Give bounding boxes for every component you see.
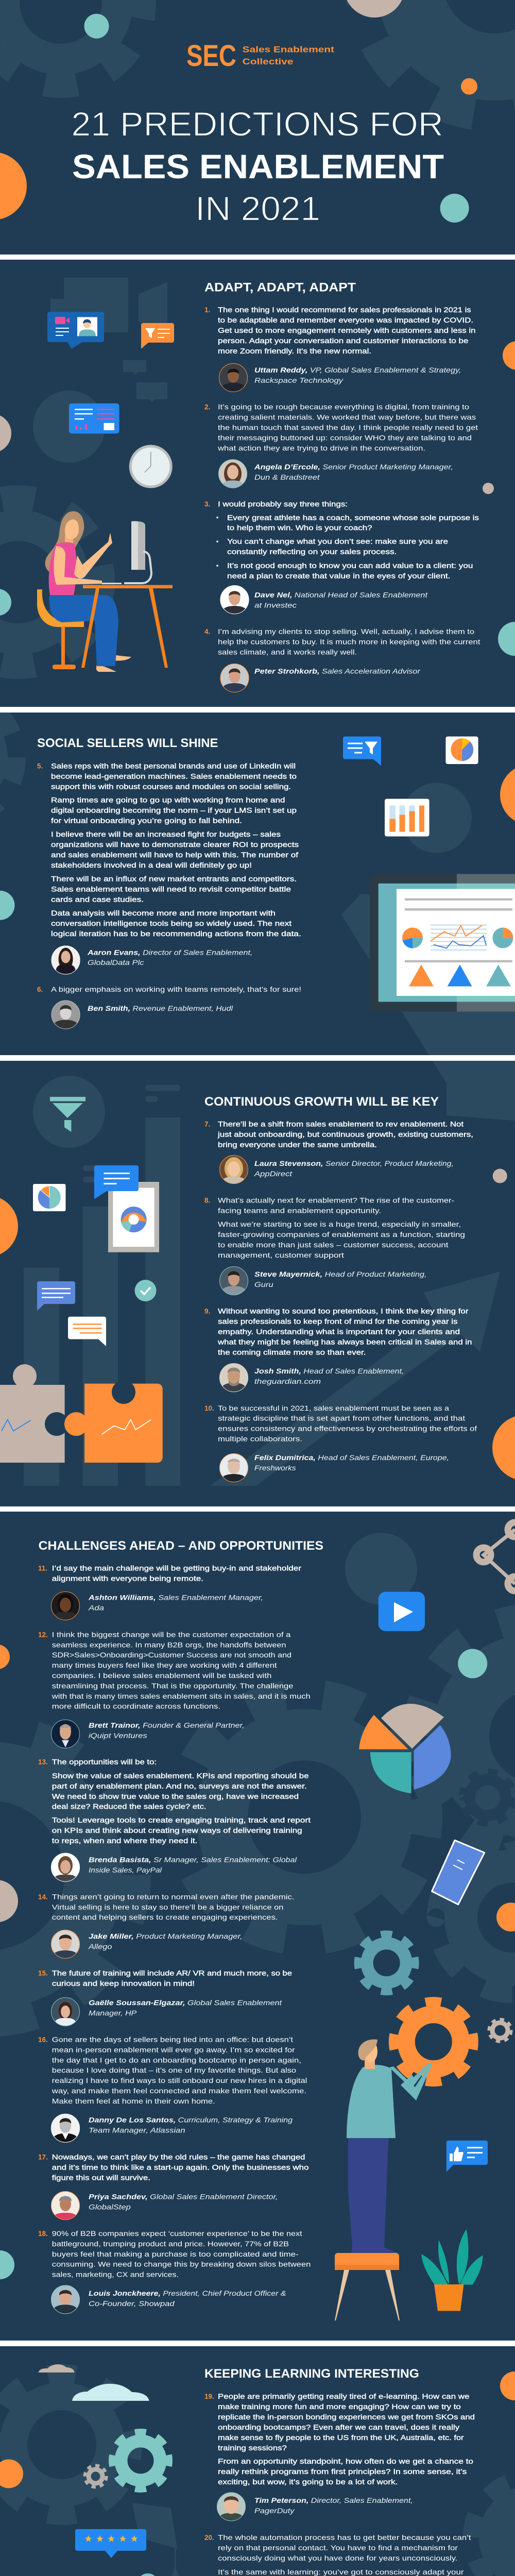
icon: tablet with donut chart — [108, 1182, 159, 1252]
prediction 14 — [38, 1892, 294, 1921]
prediction 3: constantly reflecting on your sales process. — [227, 548, 397, 556]
prediction 16: Gone are the days of sellers being tied into an office: but doesn’t — [52, 2035, 293, 2043]
icon: pie chart card — [33, 1184, 66, 1211]
prediction 13: Tools! Leverage tools to create engaging training, track and report — [52, 1816, 311, 1824]
attribution: Gaelle Soussan-Elgazar — [89, 1998, 282, 2017]
avatar: Peter Strohkorb — [220, 664, 249, 692]
logo: Sales Enablement Collective: SEC — [186, 39, 236, 73]
prediction 12: more difficult to coordinate across functions. — [52, 1702, 220, 1710]
attribution: Brett Trainor — [89, 1721, 244, 1739]
prediction 15: 15. — [38, 1969, 48, 1977]
prediction 17 — [38, 2153, 309, 2181]
title — [71, 105, 444, 228]
prediction 13: The opportunities will be to: — [52, 1758, 157, 1766]
attribution: Josh Smith: Josh Smith, Head of Sales Enablement, — [254, 1367, 404, 1375]
prediction 3: 3. — [204, 500, 210, 508]
icon: blue funnel bubble — [343, 736, 381, 766]
prediction 5: cards and case studies. — [51, 895, 144, 903]
prediction 18: battleground, trumping product and price. However, 77% of B2B — [52, 2240, 289, 2248]
icon: funnel — [50, 1097, 85, 1132]
avatar: Angela D'Ercole — [218, 460, 247, 488]
prediction 8: facing teams and enablement opportunity. — [218, 1207, 381, 1215]
prediction 20: 20. — [204, 2534, 214, 2541]
attribution: Louis Jonckheere: Louis Jonckheere, President, Chief Product Officer & — [89, 2289, 286, 2297]
attribution: Priya Sachdev: Priya Sachdev, Global Sales Enablement Director, — [89, 2193, 278, 2201]
icon: small tan gear — [489, 2020, 511, 2041]
attribution: Gaelle Soussan-Elgazar: Gaëlle Soussan-Elgazar, Global Sales Enablement — [89, 1998, 282, 2007]
icon: teal gear — [112, 2432, 169, 2489]
attribution: Laura Stevenson: AppDirect — [254, 1170, 293, 1178]
prediction 8: faster-growing companies of enablement as a function, starting — [218, 1230, 465, 1239]
avatar: Dave Nel — [220, 585, 249, 614]
prediction 13: part of any enablement plan. And no, surveys are not the answer. — [52, 1782, 307, 1790]
prediction 3: I would probably say three things: — [218, 500, 348, 508]
attribution: Tim Peterson: PagerDuty — [254, 2506, 295, 2515]
prediction 8: management, customer support — [218, 1251, 344, 1259]
prediction 3: Every great athlete has a coach, someone whose sole purpose is — [227, 513, 479, 521]
avatar: Brenda Basista — [51, 1853, 80, 1882]
prediction 11 — [38, 1564, 301, 1582]
prediction 19 — [204, 2392, 475, 2486]
prediction 9 — [204, 1307, 472, 1356]
prediction 17: Nowadays, we can’t play by the old rules – the game has changed — [52, 2153, 305, 2161]
prediction 2: 2. — [204, 403, 210, 411]
panel: hero — [0, 0, 515, 255]
icon: teal check badge — [137, 2573, 159, 2576]
avatar: Danny De Los Santos — [51, 2114, 80, 2143]
prediction 12: many times buyers feel like they are working with 4 different — [52, 1661, 277, 1669]
icon: pie chart card — [445, 736, 478, 764]
prediction 3: need a plan to create that value in the eyes of your client. — [227, 572, 450, 580]
illustration: monitor with report — [370, 874, 515, 1011]
logo: Sales Enablement Collective — [186, 39, 334, 73]
section heading: SOCIAL SELLERS WILL SHINE — [37, 736, 218, 750]
prediction 5: conversation intelligence tools being so widely used. The next — [51, 919, 291, 927]
attribution: Aaron Evans: GlobalData Plc — [88, 958, 144, 967]
prediction 15 — [38, 1969, 292, 1987]
attribution: Uttam Reddy: Uttam Reddy, VP, Global Sales Enablement & Strategy, — [254, 366, 461, 374]
prediction 18: consuming. We need to change this by breaking down silos between — [52, 2260, 311, 2268]
attribution: Dave Nel: Dave Nel, National Head of Sales Enablement — [254, 590, 428, 599]
attribution: Tim Peterson: Tim Peterson, Director, Sales Enablement, — [254, 2496, 413, 2504]
panel: continuous growth will be key — [0, 1061, 515, 1506]
icon: check badge — [135, 1280, 157, 1301]
prediction 19: From an opportunity standpoint, how often do we get a chance to — [218, 2457, 473, 2465]
icon: video call card — [47, 312, 104, 349]
attribution: Dave Nel: at Investec — [254, 601, 297, 609]
attribution: Angela D'Ercole: Angela D’Ercole, Senior Product Marketing Manager, — [254, 463, 453, 471]
icon: thumbs-up bubble — [447, 2141, 488, 2172]
prediction 8: 8. — [204, 1197, 210, 1205]
attribution: Priya Sachdev: GlobalStep — [89, 2203, 131, 2211]
prediction 1: Get used to more engagement remotely with customers and less in — [218, 326, 476, 334]
prediction 1: to be adaptable and remember everyone was impacted by COVID. — [218, 316, 473, 324]
prediction 14: 14. — [38, 1893, 48, 1901]
logo: Sales Enablement Collective: Collective — [243, 57, 294, 66]
avatar: Gaelle Soussan-Elgazar — [51, 1997, 80, 2026]
icon: network nodes — [476, 1522, 515, 1591]
prediction 12: I think the biggest change will be the customer expectation of a — [52, 1630, 291, 1638]
icon: bar chart card — [385, 799, 430, 836]
prediction 17: and it’s time to think like a start-up again. Only the businesses who — [52, 2163, 309, 2171]
prediction 5: and sales enablement will have to help with this. The number of — [51, 851, 298, 859]
attribution: Louis Jonckheere — [89, 2289, 286, 2308]
prediction 6: 6. — [37, 986, 43, 993]
title: IN 2021 — [195, 190, 320, 228]
panel: keeping learning interesting — [0, 2346, 515, 2576]
icon: blue phone — [432, 1840, 485, 1904]
attribution: Gaelle Soussan-Elgazar: Manager, HP — [89, 2009, 137, 2017]
prediction 13: deal size? Reduced the sales cycle? etc. — [52, 1802, 207, 1810]
illustration: potted plant — [421, 2229, 483, 2311]
avatar: Ashton Williams — [51, 1591, 80, 1620]
prediction 19: exciting, but wow, it’s going to be a lot of work. — [218, 2478, 398, 2486]
prediction 1 — [204, 306, 476, 355]
prediction 7: bring everyone under the same umbrella. — [218, 1140, 377, 1148]
attribution: Steve Mayernick — [254, 1270, 426, 1289]
prediction 20 — [204, 2533, 474, 2576]
prediction 9: 9. — [204, 1308, 210, 1315]
avatar: Steve Mayernick — [219, 1266, 248, 1295]
attribution: Dave Nel — [254, 590, 428, 609]
section heading: KEEPING LEARNING INTERESTING — [204, 2367, 419, 2381]
attribution: Priya Sachdev — [89, 2193, 278, 2211]
prediction 2: It’s going to be rough because everything is digital, from training to — [218, 403, 469, 411]
prediction 4: help the customers to buy. It is much more in keeping with the current — [218, 638, 480, 646]
prediction 12: companies. I believe sales enablement will be tasked with — [52, 1671, 271, 1680]
prediction 18: buyers feel that making a purchase is too complicated and time- — [52, 2250, 299, 2258]
prediction 4: I’m advising my clients to stop selling. Well, actually, I advise them to — [218, 628, 474, 636]
prediction 16: the day that I get to do an onboarding bootcamp in person again, — [52, 2056, 301, 2064]
prediction 13: on KPIs and think about creating new ways of delivering training — [52, 1826, 302, 1835]
avatar: Ben Smith — [52, 1000, 80, 1029]
prediction 19: make sense to fly people to the US from the UK, Australia, etc. for — [218, 2433, 464, 2442]
avatar: Louis Jonckheere — [51, 2285, 80, 2314]
icon: dashboard card — [69, 403, 119, 434]
title: SALES ENABLEMENT — [72, 147, 444, 185]
icon: periwinkle message bubble — [37, 1281, 75, 1311]
prediction 19: make training more fun and more engaging? How can we try to — [218, 2402, 461, 2411]
prediction 18 — [38, 2229, 311, 2279]
prediction 20: rely on that personal contact. You have to find a mechanism for — [218, 2544, 458, 2552]
prediction 20: The whole automation process has to get better because you can’t — [218, 2533, 471, 2541]
prediction 19: People are primarily getting really tired of e-learning. How can we — [218, 2392, 470, 2400]
prediction 5: Sales enablement teams will need to revisit competitor battle — [51, 885, 291, 893]
icon: orange gear — [393, 2002, 474, 2082]
illustration: woman at desk — [37, 511, 173, 672]
prediction 5: There will be an influx of new market entrants and competitors. — [51, 874, 297, 883]
prediction 13 — [38, 1758, 311, 1844]
prediction 9: sales professionals to keep front of mind for the coming year is — [218, 1317, 457, 1326]
prediction 17: figure this out will survive. — [52, 2173, 150, 2181]
prediction 18: 18. — [38, 2230, 48, 2238]
prediction 5: stakeholders involved in a deal will definitely go up! — [51, 861, 252, 869]
attribution: Steve Mayernick: Steve Mayernick, Head of Product Marketing, — [254, 1270, 426, 1278]
avatar: Uttam Reddy — [219, 363, 248, 392]
prediction 2: what action they are trying to drive in the conversation. — [217, 444, 425, 452]
prediction 11: I’d say the main challenge will be getting buy-in and stakeholder — [52, 1564, 301, 1572]
prediction 11: 11. — [38, 1564, 47, 1572]
prediction 20: It’s the same with learning: you’ve got to consciously adapt your — [218, 2568, 464, 2576]
chart: pie — [359, 1704, 451, 1793]
icon: tan cloud — [39, 2364, 75, 2372]
prediction 3: It’s not good enough to know you can add value to a client: you — [227, 562, 473, 570]
prediction 19: really rethink programs from first principles? In some sense, it’s — [218, 2467, 467, 2476]
prediction 16: 16. — [38, 2036, 48, 2043]
attribution: Ashton Williams: Ada — [88, 1603, 104, 1612]
attribution: Steve Mayernick: Guru — [254, 1280, 273, 1289]
prediction 13: Show the value of sales enablement. KPIs and reporting should be — [52, 1771, 309, 1780]
attribution: Brett Trainor: iQuipt Ventures — [89, 1731, 147, 1739]
prediction 13: 13. — [38, 1758, 48, 1766]
prediction 10 — [204, 1404, 477, 1443]
panel: adapt, adapt, adapt — [0, 260, 515, 707]
prediction 14: content and helping sellers to create engaging experiences. — [52, 1913, 278, 1921]
prediction 3: You can’t change what you don’t see: make sure you are — [227, 537, 448, 546]
logo: Sales Enablement Collective: Sales Enablement — [243, 45, 334, 55]
icon: small background gear — [462, 1772, 513, 1823]
prediction 12: SDR>Sales>Onboarding>Customer Success are not smooth and — [52, 1651, 291, 1659]
attribution: Josh Smith — [254, 1367, 404, 1385]
avatar: Jake Miller — [51, 1930, 80, 1959]
prediction 2: their messaging buttoned up: consider WHO they are talking to and — [218, 434, 472, 442]
prediction 2: the human touch that saved the day. I think people really need to get — [218, 423, 478, 432]
prediction 9: the coming climate more so than ever. — [218, 1348, 366, 1356]
attribution: Tim Peterson — [254, 2496, 413, 2515]
attribution: Peter Strohkorb: Peter Strohkorb, Sales Acceleration Advisor — [254, 667, 421, 675]
prediction 10: multiple collaborators. — [218, 1434, 302, 1443]
prediction 9: empathy. Understanding what is important for your clients and — [218, 1327, 460, 1335]
prediction 19: onboarding bootcamps? Even after we can travel, does it really — [218, 2423, 459, 2431]
prediction 18: 90% of B2B companies expect ‘customer experience’ to be the next — [52, 2229, 302, 2238]
prediction 12 — [38, 1630, 311, 1710]
prediction 4: sales climate, and it works really well. — [218, 648, 357, 656]
prediction 5 — [37, 761, 301, 938]
attribution: Jake Miller — [88, 1932, 243, 1951]
attribution: Felix Dumitrica — [254, 1453, 449, 1472]
prediction 8: What we’re starting to see is a huge trend, especially in smaller, — [218, 1220, 461, 1228]
prediction 15: The future of training will include AR/ VR and much more, so be — [52, 1969, 292, 1977]
prediction 5: logical iteration has to be recommending actions from the data. — [51, 929, 301, 938]
prediction 1: The one thing I would recommend for sales professionals in 2021 is — [218, 306, 471, 314]
prediction 5: I believe there will be an increased fight for budgets – sales — [51, 830, 281, 838]
icon: play button — [379, 1592, 425, 1631]
avatar: Laura Stevenson — [219, 1155, 248, 1184]
section heading: ADAPT, ADAPT, ADAPT — [204, 281, 356, 295]
prediction 16: mean in-person enablement will ever go away. I’m so excited for — [52, 2045, 295, 2054]
prediction 16 — [38, 2035, 307, 2105]
icon: small gray gear — [85, 2466, 107, 2487]
attribution: Uttam Reddy: Rackspace Technology — [254, 376, 344, 384]
prediction 7 — [204, 1120, 473, 1148]
avatar: Aaron Evans — [52, 945, 80, 974]
attribution: Brenda Basista: Inside Sales, PayPal — [89, 1866, 162, 1874]
prediction 4 — [204, 628, 480, 656]
prediction 14: Things aren’t going to return to normal even after the pandemic. — [52, 1892, 294, 1901]
icon: blue message bubble — [94, 1165, 139, 1199]
attribution: Danny De Los Santos: Danny De Los Santos, Curriculum, Strategy & Training — [89, 2116, 293, 2124]
prediction 16: realizing I have to find ways to still onboard our new hires in a digital — [52, 2076, 307, 2084]
prediction 8: What’s actually next for enablement? The rise of the customer- — [218, 1196, 454, 1205]
avatar: Tim Peterson — [217, 2493, 246, 2521]
attribution: Felix Dumitrica: Felix Dumitrica, Head of Sales Enablement, Europe, — [254, 1453, 449, 1462]
attribution: Laura Stevenson: Laura Stevenson, Senior Director, Product Marketing, — [254, 1159, 454, 1167]
attribution: Danny De Los Santos — [89, 2116, 293, 2134]
illustration: man holding gear on stool — [335, 2039, 432, 2320]
avatar: Brett Trainor — [51, 1720, 80, 1749]
prediction 19: 19. — [204, 2393, 214, 2400]
attribution: Uttam Reddy — [254, 366, 461, 384]
prediction 12: streamlining that process. That is the opportunity. The challenge — [52, 1682, 294, 1690]
attribution: Aaron Evans: Aaron Evans, Director of Sales Enablement, — [87, 948, 252, 956]
prediction 16: Make them feel at home in their own home. — [52, 2097, 215, 2105]
prediction 10: To be successful in 2021, sales enablement must be seen as a — [218, 1404, 449, 1412]
prediction 5: organizations will have to demonstrate clearer ROI to prospects — [51, 840, 299, 849]
prediction 1: person. Adapt your conversation and customer interactions to be — [218, 336, 469, 345]
prediction 3 — [204, 500, 479, 580]
prediction 2 — [204, 403, 478, 452]
prediction 6: A bigger emphasis on working with teams remotely, that’s for sure! — [51, 985, 301, 993]
prediction 19: training sessions? — [218, 2444, 287, 2452]
title: 21 PREDICTIONS FOR — [71, 105, 443, 143]
prediction 3: to help them win. Who is your coach? — [227, 523, 372, 532]
icon: orange funnel bubble — [141, 323, 174, 349]
attribution: Josh Smith: theguardian.com — [254, 1377, 321, 1385]
prediction 5: support this with robust courses and modules on social selling. — [51, 782, 291, 790]
prediction 7: 7. — [204, 1121, 210, 1128]
prediction 5: digital onboarding becoming the norm – if your LMS isn’t set up — [51, 806, 297, 814]
panel: social sellers will shine — [0, 713, 515, 1055]
prediction 10: 10. — [204, 1404, 214, 1412]
prediction 19: replicate the in-person bonding experiences we get from SKOs and — [218, 2413, 475, 2421]
prediction 16: because I love doing that – it’s one of my favorite things. But also — [52, 2066, 296, 2074]
prediction 15: curious and keep innovation in mind! — [52, 1979, 195, 1987]
attribution: Louis Jonckheere: Co-Founder, Showpad — [89, 2299, 175, 2308]
section heading: CONTINUOUS GROWTH WILL BE KEY — [204, 1095, 439, 1109]
attribution: Brenda Basista — [89, 1855, 297, 1874]
prediction 10: strategic discipline that is set apart from other functions, and that — [218, 1414, 465, 1422]
prediction 18: sales, marketing, CX and services. — [52, 2270, 179, 2279]
icon: star rating bubble — [75, 2529, 146, 2558]
prediction 1: more Zoom friendly. It’s the new normal. — [218, 347, 371, 355]
prediction 12: seamless experience. In many B2B orgs, the handoffs between — [52, 1640, 286, 1649]
prediction 8: to enable more than just sales – customer success, account — [218, 1241, 449, 1249]
prediction 7: There’ll be a shift from sales enablement to rev enablement. Not — [218, 1120, 464, 1128]
attribution: Ben Smith: Ben Smith, Revenue Enablement, Hudl — [88, 1004, 233, 1012]
attribution: Brenda Basista: Brenda Basista, Sr Manager, Sales Enablement: Global — [89, 1855, 297, 1863]
prediction 12: 12. — [38, 1631, 48, 1638]
avatar: Josh Smith — [219, 1363, 248, 1392]
prediction 10: ensures consistency and effectiveness by orchestrating the efforts of — [218, 1425, 477, 1433]
icon: teal gear — [358, 1934, 416, 1992]
attribution: Ashton Williams — [88, 1593, 263, 1612]
avatar: Priya Sachdev — [51, 2191, 80, 2220]
prediction 20: consciously doing what you have done for years unconsciously. — [218, 2554, 457, 2562]
attribution: Brett Trainor: Brett Trainor, Founder & General Partner, — [89, 1721, 244, 1729]
attribution: Ashton Williams: Ashton Williams, Sales Enablement Manager, — [88, 1593, 263, 1601]
prediction 16: way, and make them feel connected and make them feel welcome. — [52, 2087, 306, 2095]
attribution: Danny De Los Santos: Team Manager, Atlassian — [89, 2126, 185, 2134]
prediction 5: become lead-generation machines. Sales enablement needs to — [51, 772, 297, 780]
icon: light cloud — [72, 2384, 149, 2401]
illustration: puzzle pieces — [0, 1364, 163, 1463]
attribution: Jake Miller: Allego — [88, 1942, 112, 1951]
prediction 9: what they might be feeling has always been critical in Sales and in — [217, 1337, 472, 1346]
attribution: Laura Stevenson — [254, 1159, 454, 1178]
prediction 4: 4. — [204, 628, 210, 636]
icon: clock — [129, 445, 173, 488]
panel: challenges ahead and opportunities — [0, 1512, 515, 2341]
prediction 5: Ramp times are going to go up with working from home and — [51, 795, 285, 804]
prediction 13: We need to show true value to the sales org, have we increased — [52, 1792, 299, 1800]
prediction 12: with that is many times sales enablement sits in sales, and it is much — [52, 1692, 311, 1700]
prediction 7: just about onboarding, but continuous growth, existing customers, — [217, 1130, 473, 1139]
attribution: Angela D'Ercole: Dun & Bradstreet — [254, 473, 320, 481]
prediction 8 — [204, 1196, 465, 1259]
prediction 11: alignment with everyone being remote. — [52, 1574, 203, 1582]
icon: white message bubble — [68, 1317, 106, 1346]
prediction 14: Virtual selling is here to stay so there’ll be a bigger reliance on — [52, 1903, 283, 1911]
prediction 17: 17. — [38, 2154, 48, 2161]
attribution: Aaron Evans — [87, 948, 252, 967]
prediction 5: for virtual onboarding you’re going to fall behind. — [51, 816, 242, 824]
attribution: Angela D'Ercole — [254, 463, 453, 481]
section heading: CHALLENGES AHEAD – AND OPPORTUNITIES — [39, 1539, 323, 1553]
prediction 5: 5. — [37, 762, 43, 770]
prediction 13: to reps, when and where they need it. — [52, 1836, 197, 1844]
prediction 5: Data analysis will become more and more important with — [51, 909, 276, 917]
prediction 9: Without wanting to sound too pretentious, I think the key thing for — [218, 1307, 469, 1315]
attribution: Jake Miller: Jake Miller, Product Marketing Manager, — [89, 1932, 243, 1940]
avatar: Felix Dumitrica — [219, 1453, 248, 1482]
attribution: Felix Dumitrica: Freshworks — [254, 1464, 296, 1472]
prediction 2: creating salient materials. We worked that way before, but there was — [218, 413, 476, 421]
prediction 1: 1. — [204, 306, 210, 314]
prediction 5: Sales reps with the best personal brands and use of LinkedIn will — [51, 761, 296, 770]
